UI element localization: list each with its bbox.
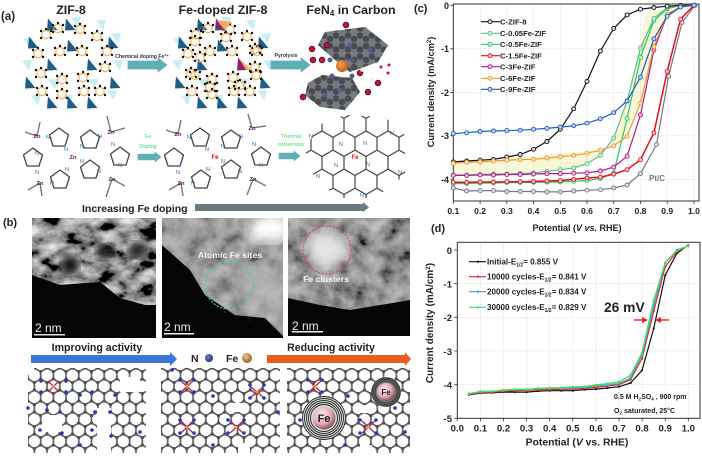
panel label b: (b): [3, 217, 17, 229]
image: TEM atomic Fe sites: 2 nm: [164, 320, 191, 334]
molecule: Fe-doped Zn imidazolate: N: [259, 163, 263, 169]
arrow: Fe doping: Fe: [145, 134, 151, 140]
curve: 30000 cycles: [469, 246, 688, 394]
heading: Improving activity: Improving activity: [52, 342, 142, 354]
x axis tick labels: 0.3: [501, 206, 513, 216]
molecule: ZIF-8 Zn imidazolate: Zn: [33, 134, 41, 140]
legend: cycles: = 0.841 V: [552, 272, 587, 282]
molecule: Fe-doped Zn imidazolate: N: [239, 134, 243, 140]
x axis tick labels: 0.7: [612, 424, 626, 434]
panel label c: (c): [414, 3, 428, 15]
x axis tick labels: 0.9: [661, 206, 673, 216]
molecule: Fe-doped Zn imidazolate: N: [221, 159, 225, 165]
arrow: pyrolysis: Pyrolysis: [274, 53, 298, 59]
legend: catalysts: C-9Fe-ZIF: [500, 85, 536, 94]
molecule: ZIF-8 Zn imidazolate: N: [118, 163, 122, 169]
x axis title: Potential (V vs. RHE): [532, 223, 622, 233]
arrow: increasing Fe doping: [195, 202, 369, 212]
legend: cycles: 20000 cycles-E: [487, 288, 545, 296]
x axis tick labels: 0.4: [528, 206, 540, 216]
molecule: FeN4 graphene fragment: N: [316, 174, 320, 180]
icon: FeN4 carbon sheets: [300, 25, 395, 115]
molecule: FeN4 graphene fragment: N: [363, 141, 367, 147]
model: carbon lattice with Fe clusters: [287, 368, 410, 457]
curve: C-0.5Fe-ZIF: [453, 5, 694, 184]
x axis tick labels: 0.1: [474, 424, 488, 434]
y axis title: 2: [425, 266, 432, 270]
legend: N and Fe atoms: [191, 353, 252, 365]
curve: C-0.05Fe-ZIF: [453, 5, 694, 175]
curve: C-3Fe-ZIF: [453, 5, 694, 175]
molecule: ZIF-8 Zn imidazolate: N: [65, 167, 69, 173]
molecule: Fe-doped Zn imidazolate: Fe: [211, 155, 219, 161]
arrow: Fe doping: [138, 134, 161, 162]
heading: FeN4 in Carbon: 4: [330, 9, 335, 18]
y axis tick labels: 0: [447, 246, 452, 257]
x axis tick labels: 0.2: [497, 424, 510, 434]
x axis tick labels: 0.2: [474, 206, 486, 216]
note: electrolyte conditions: SO: [641, 394, 652, 401]
y axis tick labels: 0: [444, 1, 449, 11]
molecule: Fe-doped Zn imidazolate: Zn: [174, 132, 182, 138]
icon: Fe-doped ZIF-8 framework: [172, 17, 273, 108]
y axis title: ): [425, 263, 436, 266]
x axis tick labels: 0.5: [566, 424, 580, 434]
x axis tick labels: 0.6: [589, 424, 603, 434]
note: electrolyte conditions: 2: [619, 410, 622, 416]
molecule: ZIF-8 Zn imidazolate: N: [80, 144, 84, 150]
legend: catalysts: C-1.5Fe-ZIF: [500, 52, 542, 60]
molecule: ZIF-8 Zn imidazolate: Zn: [69, 155, 77, 161]
y axis title: Current density (mA/cm: [425, 270, 436, 383]
arrow: chemical doping: [115, 54, 169, 72]
molecule: Fe-doped Zn imidazolate: N: [187, 135, 191, 141]
legend: catalysts: C-0.05Fe-ZIF: [500, 29, 546, 38]
molecule: FeN4 graphene fragment: N: [398, 170, 402, 176]
panel label a: (a): [1, 11, 15, 23]
molecule: FeN4 graphene fragment: [306, 115, 405, 198]
y axis tick labels: -3: [444, 347, 452, 358]
x axis tick labels: 1.0: [682, 424, 695, 434]
x axis title: Potential (V vs. RHE): [526, 438, 628, 448]
legend: cycles: 30000 cycles-E: [487, 303, 545, 312]
x axis tick labels: [447, 206, 700, 216]
molecule: ZIF-8 Zn imidazolate: N: [46, 135, 50, 141]
x axis tick labels: 0.8: [635, 206, 647, 216]
x axis tick labels: 0.8: [635, 424, 649, 434]
y axis tick labels: [441, 1, 449, 185]
note: electrolyte conditions: O: [614, 408, 619, 415]
legend: cycles: 10000 cycles-E: [487, 272, 545, 282]
panel: (b) microscopy and models: [3, 214, 411, 457]
curve: C-1.5Fe-ZIF: [453, 5, 694, 182]
molecule: Fe-doped Zn imidazolate: N: [252, 142, 256, 148]
y axis tick labels: -1: [444, 280, 453, 290]
molecule: ZIF-8 Zn imidazolate: Zn: [36, 181, 44, 187]
panel label d: (d): [431, 223, 445, 235]
molecule: ZIF-8 Zn imidazolate: N: [50, 181, 54, 187]
molecule: ZIF-8 Zn imidazolate: Zn: [108, 177, 116, 183]
image: TEM Fe clusters: [288, 218, 410, 336]
arrow: thermal conversion: conversion: [278, 142, 304, 148]
y axis tick labels: -5: [444, 414, 453, 425]
image: TEM low Fe: 2 nm: [35, 321, 62, 335]
y axis tick labels: -2: [441, 88, 449, 98]
heading: Increasing Fe doping: Increasing Fe doping: [82, 203, 188, 215]
heading: Reducing activity: Reducing activity: [287, 342, 375, 354]
arrow: thermal conversion: [278, 134, 304, 161]
x axis tick labels: 0.9: [659, 424, 672, 434]
molecule: ZIF-8 Zn imidazolate: N: [35, 151, 39, 157]
y axis tick labels: [444, 246, 453, 425]
label: Pt/C: Pt/C: [649, 174, 665, 183]
molecule: ZIF-8 Zn imidazolate: Zn: [107, 130, 115, 136]
model: carbon lattice with atomic Fe sites: [161, 368, 280, 457]
panel: (d) stability curves: [425, 223, 700, 448]
arrow: thermal conversion: Thermal: [281, 134, 301, 140]
x axis tick labels: 0.7: [608, 206, 620, 216]
legend: cycles: = 0.834 V: [552, 288, 587, 296]
legend: cycles: Initial-E: [487, 258, 516, 266]
arrow: chemical doping: Chemical doping Fe³⁺: [115, 54, 169, 60]
y axis tick labels: -4: [441, 175, 449, 185]
molecule: ZIF-8 Zn imidazolate: N: [97, 169, 101, 175]
x axis tick labels: 0.0: [451, 424, 464, 434]
curve: C-9Fe-ZIF: [453, 5, 694, 134]
note: electrolyte conditions: 0.5 M H: [614, 394, 639, 401]
legend: cycles: = 0.855 V: [523, 258, 559, 266]
legend: catalysts: [481, 18, 546, 94]
image: TEM atomic Fe sites: Atomic Fe sites: [198, 250, 262, 260]
arrow: reducing activity: [267, 352, 411, 366]
y axis tick labels: -4: [444, 380, 453, 392]
molecule: Fe-doped Zn imidazolate: N: [221, 144, 225, 150]
chart: LSV curves: [426, 1, 700, 233]
curve: C-6Fe-ZIF: [453, 5, 694, 163]
molecule: FeN4 graphene fragment: N: [366, 162, 370, 168]
heading: FeN4 in Carbon: in Carbon: [334, 3, 396, 17]
molecule: ZIF-8 Zn imidazolate: N: [111, 142, 115, 148]
panel: (a) synthesis scheme: [1, 3, 408, 215]
y axis title: Current density (mA/cm: [426, 43, 436, 147]
molecule: Fe-doped Zn imidazolate: N: [238, 169, 242, 175]
legend: catalysts: C-6Fe-ZIF: [500, 74, 536, 83]
molecule: FeN4 graphene fragment: N: [334, 163, 338, 169]
model: carbon lattice with FeN4 sites and pores: [28, 368, 146, 457]
x axis tick labels: 0.3: [520, 424, 533, 434]
legend: N and Fe atoms: N: [191, 353, 199, 365]
molecule: Fe-doped Zn imidazolate: Zn: [177, 181, 185, 187]
heading: FeN4 in Carbon: FeN: [306, 3, 330, 17]
y axis tick labels: -1: [441, 44, 449, 54]
curve: C-ZIF-8: [453, 5, 694, 162]
image: TEM Fe clusters: Fe clusters: [303, 274, 349, 284]
molecule: ZIF-8 Zn imidazolate: [24, 116, 130, 197]
legend: cycles: [469, 258, 587, 314]
arrow: Fe doping: Doping: [139, 144, 157, 150]
y axis title: 2: [427, 39, 433, 43]
note: electrolyte conditions: saturated, 25°C: [622, 407, 675, 415]
legend: catalysts: C-0.5Fe-ZIF: [500, 40, 542, 49]
y axis title: ): [426, 37, 436, 40]
x axis tick labels: 0.1: [447, 206, 459, 216]
molecule: Fe-doped Zn imidazolate: N: [191, 181, 195, 187]
callout: 26 mV shift: [604, 300, 669, 323]
molecule: Fe-doped Zn imidazolate: N: [206, 167, 210, 173]
molecule: Fe-doped Zn imidazolate: [164, 114, 270, 196]
legend: catalysts: C-ZIF-8: [500, 18, 527, 26]
legend: cycles: = 0.829 V: [552, 303, 587, 312]
molecule: ZIF-8 Zn imidazolate: N: [64, 147, 68, 153]
curve: 20000 cycles: [469, 246, 688, 394]
molecule: ZIF-8 Zn imidazolate: N: [35, 170, 39, 176]
note: electrolyte conditions: [614, 394, 686, 416]
image: TEM Fe clusters: 2 nm: [292, 319, 319, 333]
legend: cycles: 1/2: [516, 262, 523, 268]
chart: durability LSV: [425, 242, 700, 448]
molecule: Fe-doped Zn imidazolate: N: [205, 147, 209, 153]
molecule: ZIF-8 Zn imidazolate: N: [98, 134, 102, 140]
legend: catalysts: C-3Fe-ZIF: [500, 62, 536, 72]
molecule: Fe-doped Zn imidazolate: Zn: [248, 126, 256, 132]
y axis tick labels: -2: [444, 313, 452, 324]
curve: Pt/C: [453, 5, 695, 192]
heading: Fe-doped ZIF-8: Fe-doped ZIF-8: [179, 3, 268, 17]
legend: cycles: 1/2: [545, 278, 552, 284]
curve: 10000 cycles: [469, 246, 688, 394]
icon: small Fe cluster: Fe: [381, 388, 391, 397]
molecule: FeN4 graphene fragment: N: [360, 193, 364, 199]
arrow: improving activity: [31, 352, 177, 366]
callout: 26 mV shift: 26 mV: [604, 300, 645, 315]
molecule: FeN4 graphene fragment: N: [390, 131, 394, 137]
legend: cycles: 1/2: [545, 308, 552, 314]
x axis tick labels: 0.6: [581, 206, 593, 216]
molecule: FeN4 graphene fragment: N: [339, 142, 343, 148]
molecule: FeN4 graphene fragment: Fe: [351, 155, 359, 161]
icon: ZIF-8 framework: [22, 17, 123, 108]
legend: N and Fe atoms: Fe: [226, 353, 238, 365]
x axis tick labels: 0.5: [554, 206, 566, 216]
molecule: Fe-doped Zn imidazolate: N: [176, 170, 180, 176]
note: electrolyte conditions: 2: [639, 396, 642, 402]
curve: initial: [469, 245, 688, 395]
image: TEM atomic Fe sites: [162, 214, 292, 338]
legend: cycles: 1/2: [545, 292, 552, 298]
note: electrolyte conditions: 4: [651, 396, 654, 402]
note: electrolyte conditions: , 900 rpm: [654, 394, 686, 401]
x axis tick labels: [451, 424, 695, 434]
arrow: pyrolysis: [271, 53, 310, 72]
image: TEM low Fe: [32, 218, 156, 338]
x axis tick labels: 1.0: [688, 206, 700, 216]
icon: large Fe cluster: Fe: [318, 413, 330, 425]
heading: ZIF-8: ZIF-8: [56, 3, 86, 17]
panel: (c) ORR polarization curves: [414, 1, 700, 233]
molecule: Fe-doped Zn imidazolate: Zn: [249, 177, 257, 183]
y axis tick labels: -3: [441, 131, 449, 141]
x axis tick labels: 0.4: [543, 424, 557, 434]
molecule: FeN4 graphene fragment: N: [309, 134, 313, 140]
molecule: ZIF-8 Zn imidazolate: N: [80, 159, 84, 165]
